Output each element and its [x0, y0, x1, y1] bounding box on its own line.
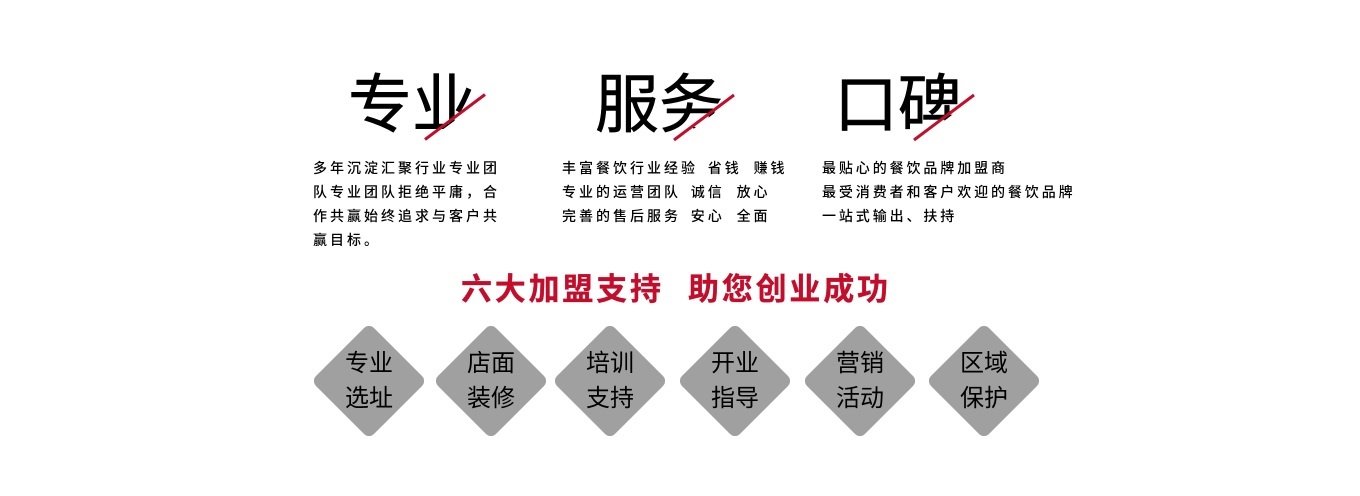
- diamond: 营销活动: 营销: [836, 350, 884, 376]
- text block: 专业 description: 多年沉淀汇聚行业专业团 队专业团队拒绝平庸，合 作共赢始终追求与客户共 赢目标。: [313, 160, 500, 248]
- heading: 助您创业成功: 助您创业成功: [688, 272, 891, 307]
- diamond: 开业指导: 指导: [711, 384, 759, 412]
- diamond: 店面装修: 店面: [467, 350, 515, 376]
- diamond: 培训支持: 支持: [586, 384, 634, 412]
- diamond: 培训支持: 培训: [586, 350, 634, 376]
- heading: 六大加盟支持: 六大加盟支持: [461, 272, 664, 307]
- title: 服务: 服务: [595, 69, 723, 141]
- diamond: 培训支持: [555, 326, 665, 436]
- text block: 口碑 description: 最贴心的餐饮品牌加盟商 最受消费者和客户欢迎的餐饮品牌 一站式输出、扶持: [822, 160, 1076, 224]
- diamond: 营销活动: 活动: [836, 384, 884, 412]
- diamond: 区域保护: [929, 326, 1039, 436]
- title: 口碑: 口碑: [834, 69, 962, 141]
- title: 专业: 专业: [348, 69, 476, 141]
- diamond: 店面装修: [436, 326, 546, 436]
- diamond: 专业选址: 选址: [345, 384, 393, 412]
- diamond: 专业选址: 专业: [345, 350, 393, 376]
- diamond: 开业指导: 开业: [711, 350, 759, 376]
- diamond: 开业指导: [680, 326, 790, 436]
- diamond: 专业选址: [314, 326, 424, 436]
- diamond: 营销活动: [805, 326, 915, 436]
- diamond: 店面装修: 装修: [467, 384, 515, 412]
- text block: 服务 description: 丰富餐饮行业经验 省钱 赚钱 专业的运营团队 诚信 放心 完善的售后服务 安心 全面: [562, 160, 788, 224]
- diamond: 区域保护: 区域: [960, 350, 1008, 376]
- diamond: 区域保护: 保护: [960, 384, 1008, 412]
